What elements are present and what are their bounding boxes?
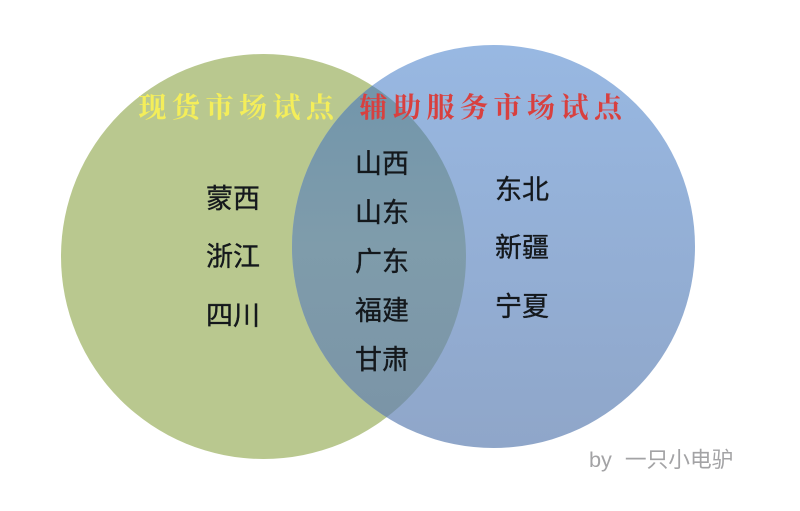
attribution: by 一只小电驴 — [589, 447, 733, 472]
overlap region — [292, 86, 466, 418]
heading: ancillary services market pilots: 辅助服务市场试点 — [360, 92, 628, 124]
list: ancillary services only: 东北 — [495, 175, 549, 205]
list: both markets: 福建 — [355, 296, 409, 326]
circle: ancillary services market pilots — [292, 45, 695, 448]
heading: spot market pilots: 现货市场试点 — [138, 92, 340, 124]
list: spot market only — [206, 184, 260, 331]
list: spot market only: 浙江 — [206, 242, 260, 272]
venn diagram — [61, 45, 732, 472]
list: both markets: 山西 — [355, 149, 409, 179]
list: spot market only: 四川 — [206, 301, 260, 331]
list: both markets: 山东 — [355, 198, 409, 228]
list: both markets: 广东 — [355, 247, 409, 277]
list: ancillary services only: 新疆 — [495, 233, 549, 263]
list: ancillary services only: 宁夏 — [495, 292, 549, 322]
circle: spot market pilots — [61, 54, 466, 459]
list: spot market only: 蒙西 — [206, 184, 260, 214]
list: both markets: 甘肃 — [355, 345, 409, 375]
list: ancillary services only — [495, 175, 549, 322]
list: both markets — [355, 149, 409, 375]
